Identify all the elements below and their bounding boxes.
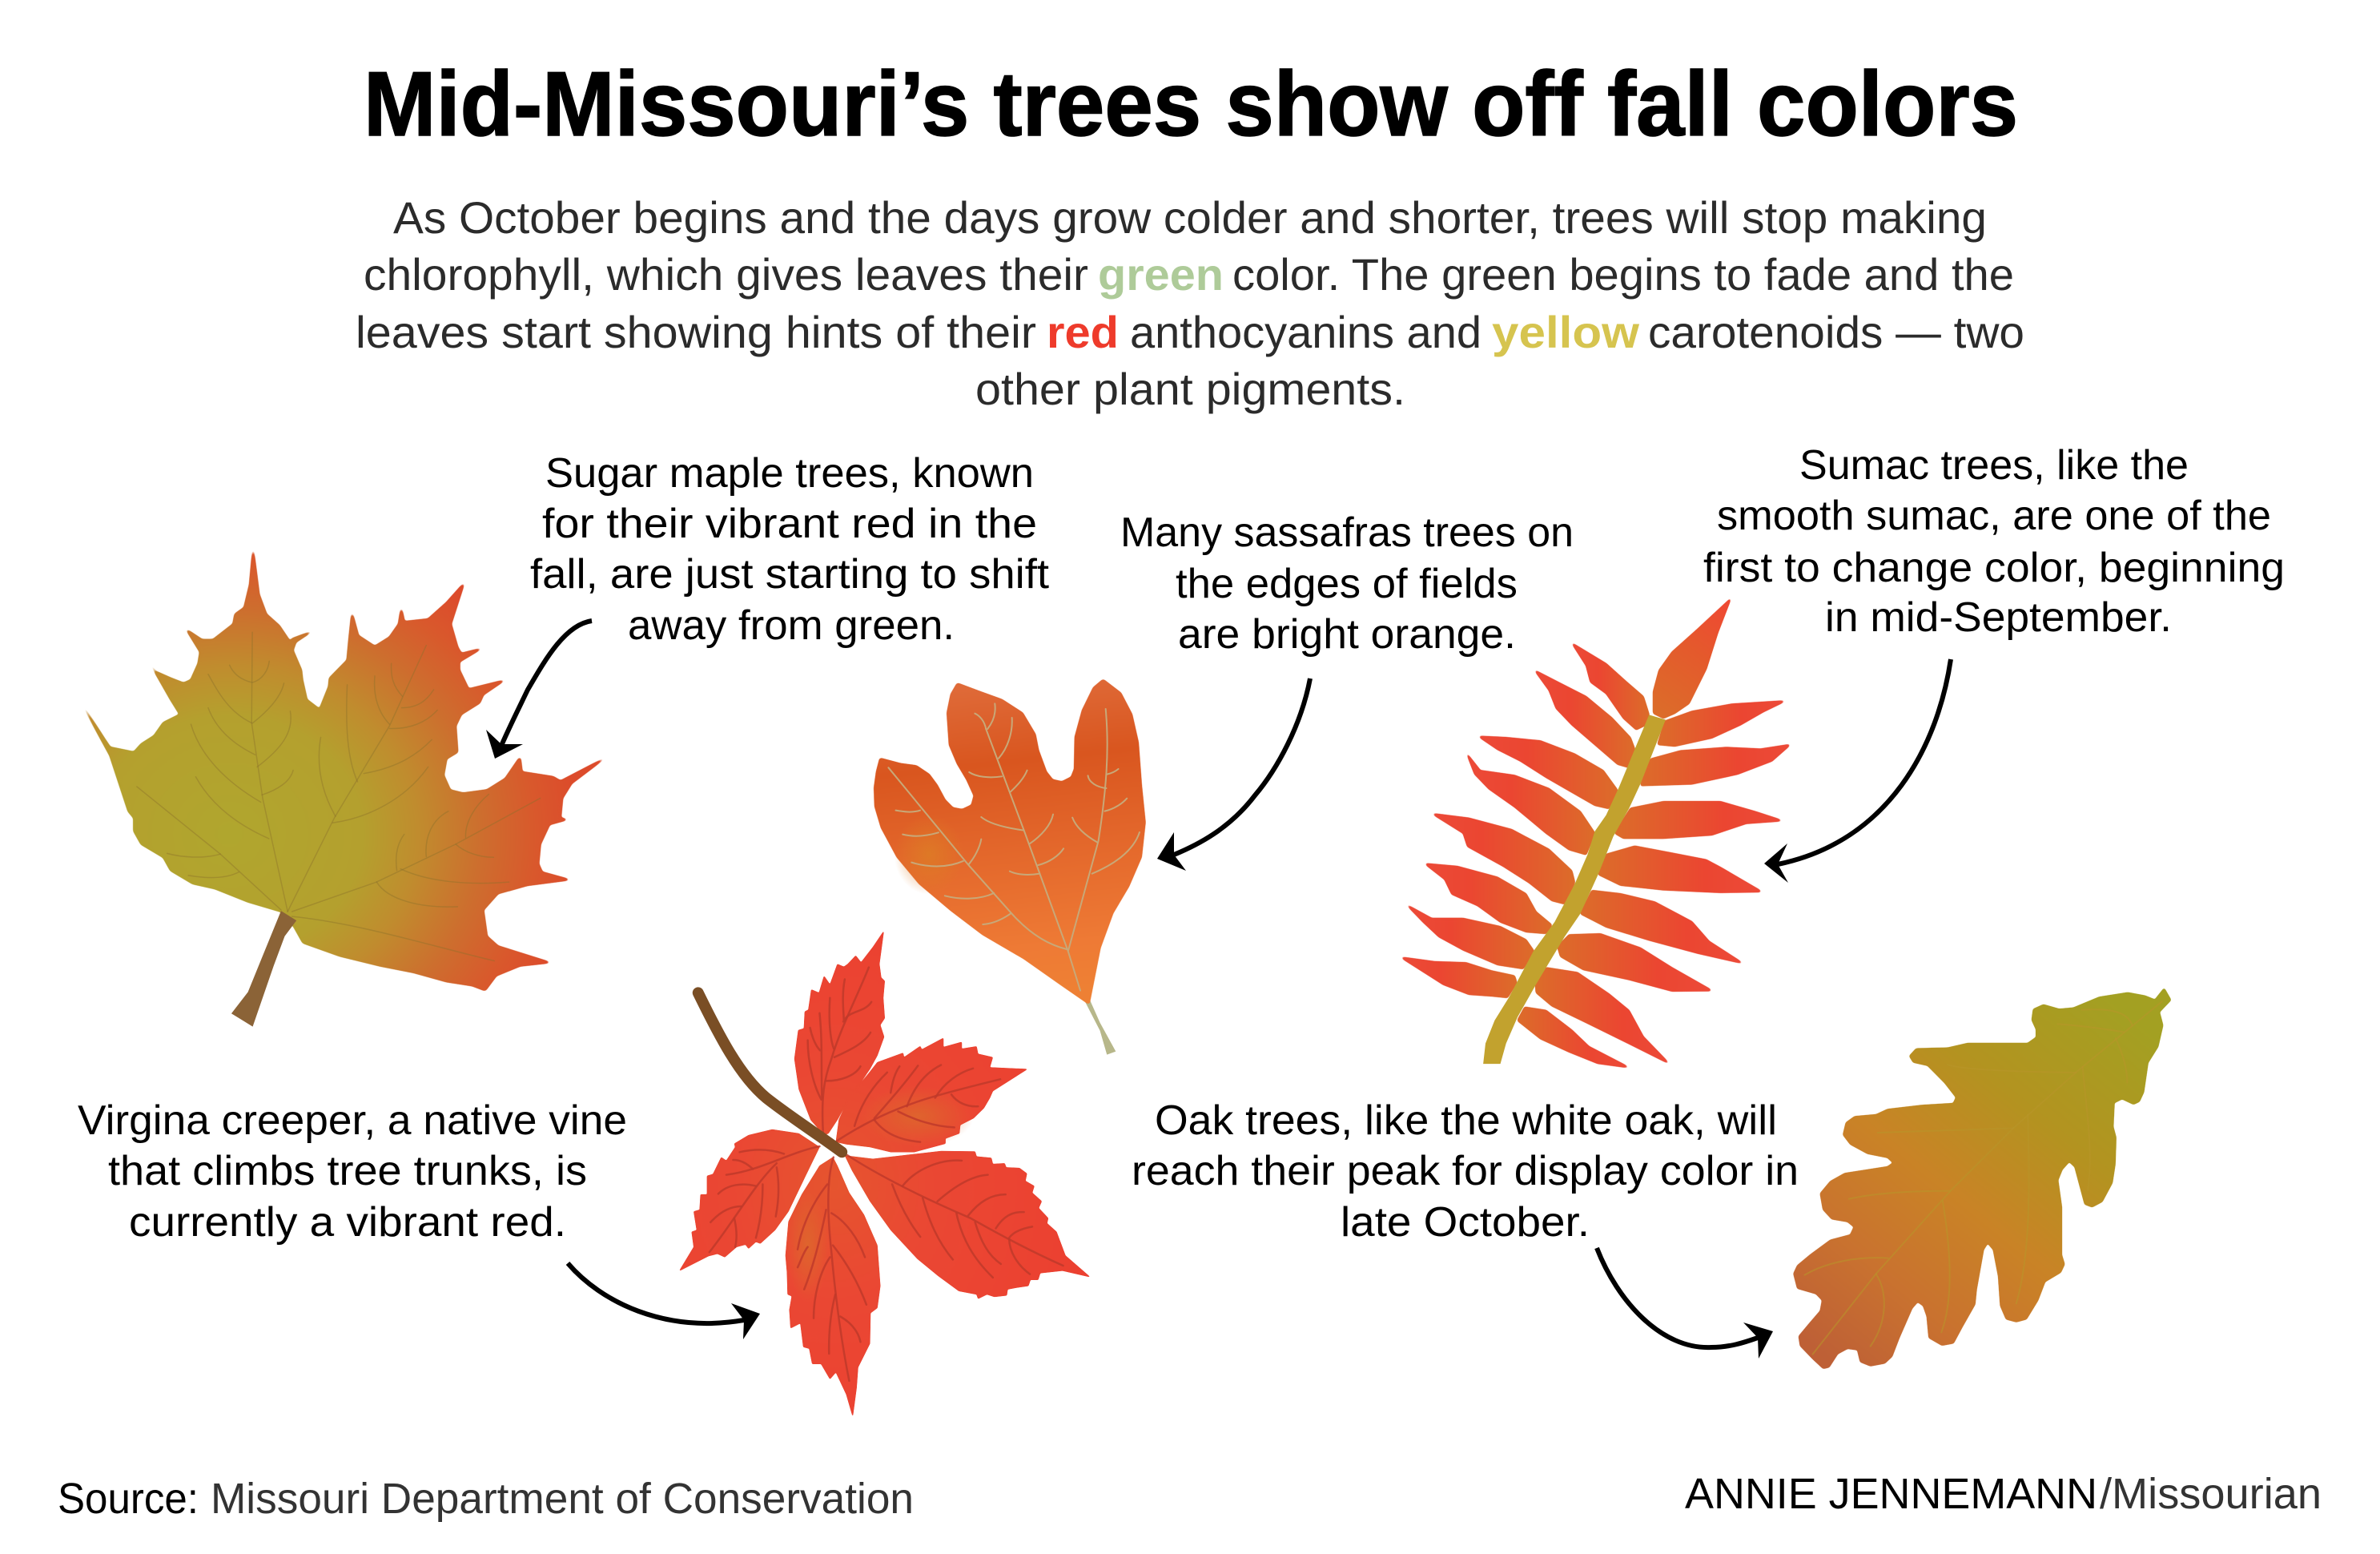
- note: virginia creeper: that climbs tree trunks, is: [108, 1148, 587, 1194]
- note: oak: Oak trees, like the white oak, will: [1155, 1097, 1777, 1144]
- note: oak: reach their peak for display color in: [1132, 1148, 1799, 1194]
- source credit: Source:: [58, 1475, 199, 1523]
- intro text block: anthocyanins and: [1130, 307, 1481, 357]
- leaf: sumac: [1401, 598, 1791, 1068]
- note: sassafras: the edges of fields: [1176, 561, 1518, 607]
- leaf: sugar maple: [81, 549, 605, 1027]
- maple veins: [137, 632, 541, 961]
- byline: /Missourian: [2100, 1470, 2322, 1518]
- note: sugar maple: fall, are just starting to shift: [530, 551, 1050, 598]
- title: Mid-Missouri’s trees show off fall colors: [364, 54, 2018, 155]
- source credit: Missouri Department of Conservation: [211, 1475, 914, 1523]
- note: virginia creeper: currently a vibrant red.: [129, 1199, 566, 1246]
- creeper colour wash: [787, 1086, 974, 1303]
- note: sumac: first to change color, beginning: [1703, 545, 2285, 591]
- note: sumac: in mid-September.: [1825, 594, 2172, 641]
- intro text block: color. The green begins to fade and the: [1232, 249, 2014, 300]
- leaf: sassafras: [874, 679, 1145, 1055]
- note: oak: [1132, 1097, 1799, 1246]
- intro text block: yellow: [1492, 307, 1639, 357]
- note: sumac: smooth sumac, are one of the: [1717, 493, 2271, 539]
- byline: ANNIE JENNEMANN: [1685, 1470, 2097, 1518]
- oak veins: [1805, 1001, 2162, 1355]
- arrow: to maple: [486, 621, 592, 759]
- note: sassafras: [1120, 509, 1574, 658]
- intro text block: [356, 192, 2024, 414]
- leaf: oak: [1794, 988, 2171, 1368]
- intro text block: chlorophyll, which gives leaves their: [364, 249, 1088, 300]
- sassafras veins: [888, 703, 1140, 991]
- intro text block: carotenoids — two: [1648, 307, 2024, 357]
- sassafras colour wash: [895, 815, 964, 895]
- intro text block: red: [1047, 307, 1119, 357]
- creeper veins: [710, 968, 1063, 1381]
- note: sugar maple: Sugar maple trees, known: [545, 450, 1034, 497]
- creeper stem: [698, 992, 842, 1152]
- byline: [1685, 1470, 2322, 1518]
- intro text block: green: [1098, 249, 1224, 300]
- note: virginia creeper: [78, 1097, 627, 1246]
- intro text block: As October begins and the days grow colder and shorter, trees will stop making: [393, 192, 1987, 243]
- arrow: to oak: [1597, 1248, 1773, 1359]
- note: sassafras: are bright orange.: [1178, 611, 1516, 658]
- note: sumac: [1703, 442, 2285, 641]
- arrow: to sassafras: [1157, 678, 1310, 871]
- note: sugar maple: for their vibrant red in the: [542, 501, 1037, 547]
- note: virginia creeper: Virgina creeper, a native vine: [78, 1097, 627, 1144]
- sassafras stem: [1084, 1000, 1116, 1055]
- arrow: to virginia creeper: [568, 1263, 760, 1339]
- leaf: virginia creeper: [679, 931, 1091, 1417]
- intro text block: leaves start showing hints of their: [356, 307, 1036, 357]
- note: sumac: Sumac trees, like the: [1799, 442, 2189, 489]
- note: oak: late October.: [1341, 1199, 1590, 1246]
- arrow: to sumac: [1764, 659, 1951, 883]
- maple stem: [231, 911, 296, 1027]
- note: sugar maple: [530, 450, 1050, 649]
- intro text block: other plant pigments.: [975, 364, 1405, 414]
- sumac stem: [1483, 715, 1666, 1064]
- note: sugar maple: away from green.: [628, 602, 955, 649]
- note: sassafras: Many sassafras trees on: [1120, 509, 1574, 556]
